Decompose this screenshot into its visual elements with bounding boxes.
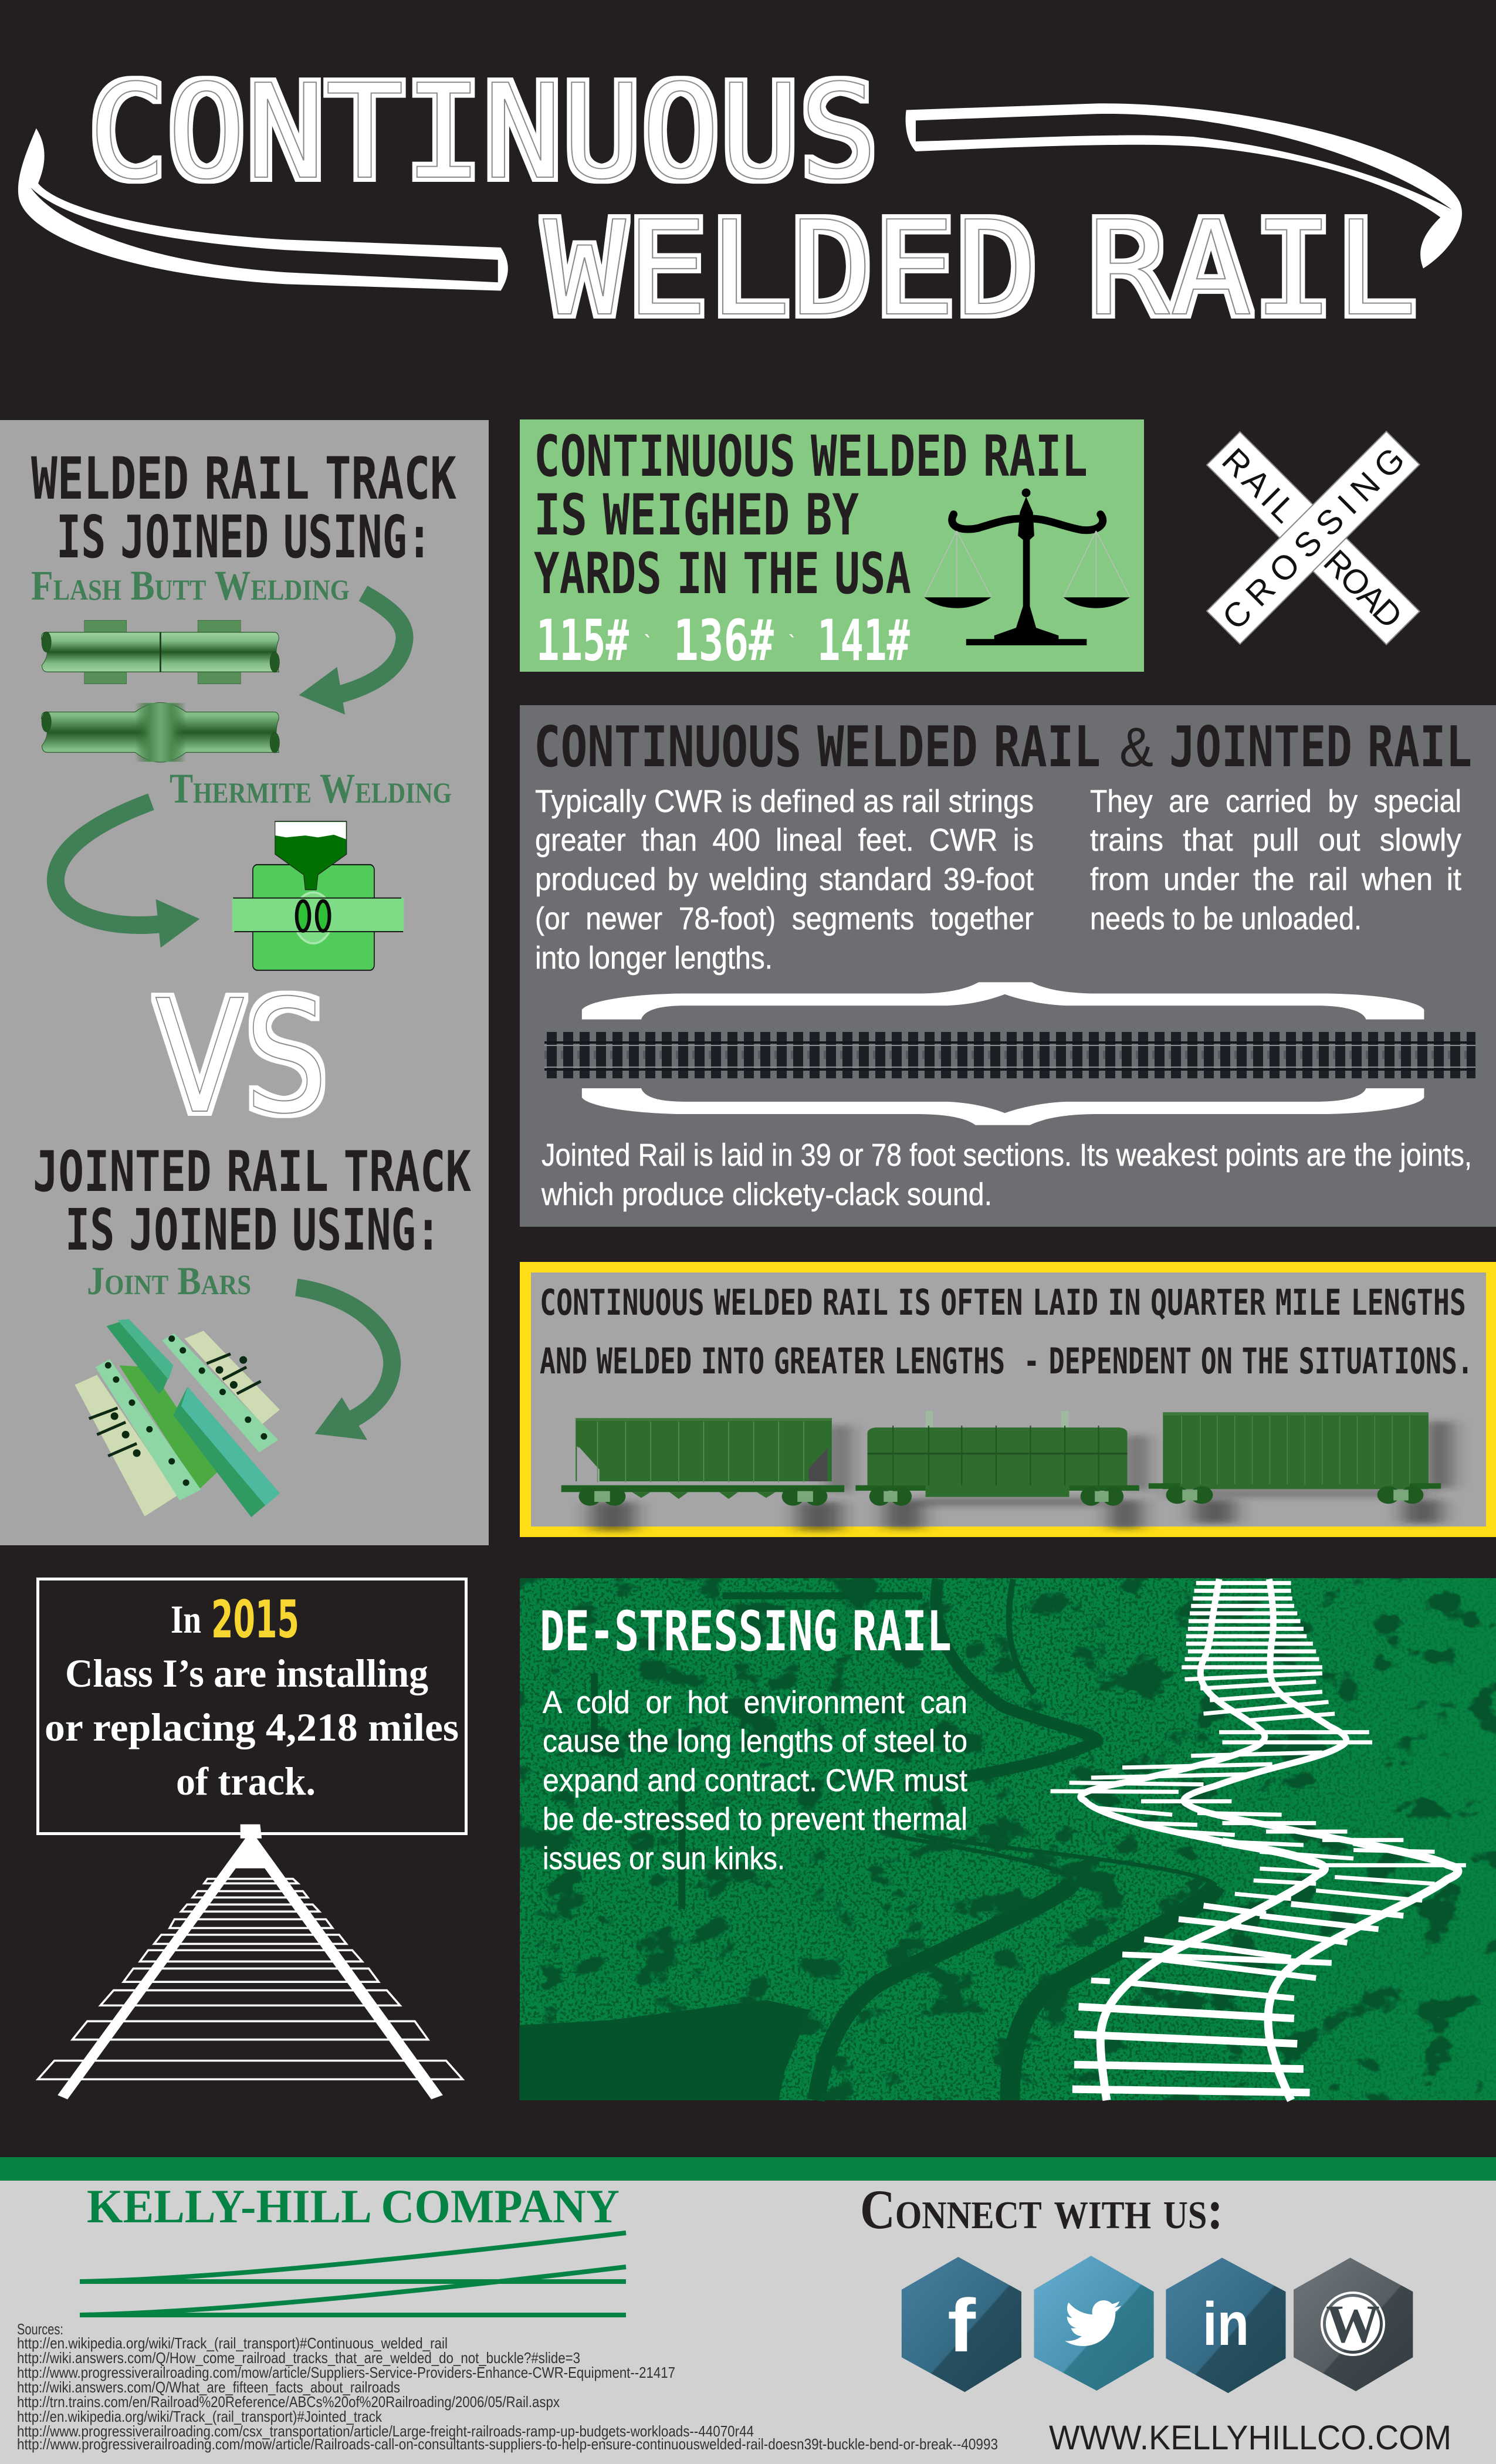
weights: 115# <box>536 608 629 673</box>
weights <box>536 608 910 673</box>
label: thermite welding: Thermite Welding <box>170 765 452 812</box>
brace: top <box>582 982 1424 1020</box>
heading: de-stressing rail: DE-STRESSING RAIL <box>540 1600 952 1664</box>
heading: is joined using: IS JOINED USING: <box>56 503 432 571</box>
panel: quarter mile lengths <box>520 1262 1496 1537</box>
icon: railroad crossing sign: RAIL <box>1214 441 1304 530</box>
weights: ` <box>787 632 798 653</box>
label: flash butt welding: Flash Butt Welding <box>31 562 350 609</box>
text: CWR definition: produced by welding standard 39-foot <box>535 862 1034 897</box>
title line 2: WELDED RAIL <box>543 194 1417 345</box>
icon: linkedin: in <box>1203 2290 1249 2358</box>
brace: bottom <box>582 1088 1424 1125</box>
VS: VS <box>155 966 328 1148</box>
text: de-stressing body: issues or sun kinks. <box>543 1841 785 1876</box>
text: de-stressing body: expand and contract. CWR must <box>543 1763 967 1798</box>
icon: wordpress: W <box>1326 2294 1380 2354</box>
title line 1: CONTINUOUS <box>88 57 878 208</box>
text: carried by trains: trains that pull out slowly <box>1090 823 1461 858</box>
illustration: thermite mould <box>232 821 404 970</box>
text: carried by trains: needs to be unloaded. <box>1090 901 1362 936</box>
track strip <box>544 1032 1475 1078</box>
icon: twitter <box>1034 2256 1154 2391</box>
text: class I line: Class I’s are installing <box>65 1651 428 1695</box>
text: CWR definition: Typically CWR is defined as rail strings <box>535 784 1034 819</box>
text: CWR definition: (or newer 78-foot) segments together <box>535 901 1034 936</box>
heading line 3: YARDS IN THE USA <box>534 541 911 607</box>
sources: http://www.progressiverailroading.com/mow/article/Railroads-call-on-consultants-suppliers-to-help-ensure-continuouswelded-rail-doesn39t-buckle-bend-or-break--40993 <box>17 2435 998 2453</box>
weights: 141# <box>817 608 910 673</box>
freight car: hopper <box>561 1418 844 1506</box>
sources: http://wiki.answers.com/Q/How_come_railroad_tracks_that_are_welded_do_not_buckle?#slide=3 <box>17 2349 580 2367</box>
text: in: In <box>171 1597 201 1641</box>
text: of track: of track. <box>176 1759 316 1803</box>
icon: balance scale <box>924 489 1130 645</box>
text: jointed rail: which produce clickety-clack sound. <box>541 1177 992 1212</box>
sources: http://www.progressiverailroading.com/csx_transportation/article/Large-freight-railroads-ramp-up-budgets-workloads--44070r44 <box>17 2422 754 2440</box>
freight car: box car <box>1149 1412 1441 1504</box>
sources: http://trn.trains.com/en/Railroad%20Reference/ABCs%20of%20Railroading/2006/05/Rail.aspx <box>17 2393 560 2411</box>
heading: connect with us: Connect with us: <box>860 2178 1223 2240</box>
illustration: perspective track <box>38 1825 462 2099</box>
sources: http://wiki.answers.com/Q/What_are_fifteen_facts_about_railroads <box>17 2378 400 2396</box>
heading ampersand: & <box>1119 716 1153 779</box>
panel: CWR and jointed rail <box>520 705 1496 1227</box>
texture: blotches <box>520 1578 1496 2100</box>
title <box>18 57 1462 345</box>
icon: linkedin <box>1166 2257 1285 2393</box>
freight car: covered coil <box>855 1411 1139 1506</box>
text: de-stressing body: A cold or hot environment can <box>543 1685 967 1720</box>
text: miles line: or replacing 4,218 miles <box>45 1705 459 1749</box>
illustration: flash butt rails <box>41 620 279 762</box>
icon: railroad crossing sign: CROSSING <box>1215 440 1412 637</box>
arrow: thermite <box>56 802 199 948</box>
text: jointed rail <box>541 1138 1472 1212</box>
heading: is joined using: IS JOINED USING: <box>65 1197 441 1263</box>
text: carried by trains: from under the rail when it <box>1090 862 1461 897</box>
icon: facebook: f <box>947 2284 976 2368</box>
heading lines: CONTINUOUS WELDED RAIL <box>534 424 1088 489</box>
panel: 2015 callout <box>38 1579 466 1834</box>
illustration: kinked white track <box>1051 1579 1466 2100</box>
left swoosh <box>18 128 508 291</box>
heading: jointed rail track: JOINTED RAIL TRACK <box>33 1140 471 1204</box>
sources: http://en.wikipedia.org/wiki/Track_(rail_transport)#Continuous_welded_rail <box>17 2334 448 2352</box>
sources <box>17 2320 998 2453</box>
text: 2015: 2015 <box>211 1589 299 1650</box>
sources: http://www.progressiverailroading.com/mow/article/Suppliers-Service-Providers-Enhance-CWR-Equipment--21417 <box>17 2364 675 2381</box>
heading: CONTINUOUS WELDED RAIL <box>534 715 1101 780</box>
arrow: joint bars <box>296 1287 392 1440</box>
website url: WWW.KELLYHILLCO.COM <box>1049 2419 1451 2457</box>
panel: weighed by yards <box>520 419 1144 673</box>
weights: ` <box>643 632 654 653</box>
text: carried by trains <box>1090 784 1461 936</box>
illustration: joint bars <box>75 1319 280 1517</box>
text: CWR definition: into longer lengths. <box>535 940 773 976</box>
icon: facebook <box>902 2257 1021 2392</box>
text: CWR definition <box>535 784 1034 976</box>
arrow: flash butt <box>299 593 405 715</box>
texture: speckle <box>520 1578 1496 2100</box>
text: CWR definition: greater than 400 lineal feet. CWR is <box>535 823 1034 858</box>
icon: wordpress <box>1294 2257 1413 2391</box>
panel: left comparison <box>0 420 489 1545</box>
sources: http://en.wikipedia.org/wiki/Track_(rail_transport)#Jointed_track <box>17 2408 383 2425</box>
company logo: rail switch <box>80 2233 626 2315</box>
right swoosh <box>906 103 1462 269</box>
background dark track bands <box>519 1579 1216 2100</box>
company name: KELLY-HILL COMPANY <box>87 2179 620 2233</box>
heading line 2: IS WEIGHED BY <box>534 482 859 548</box>
label: joint bars: Joint Bars <box>87 1258 251 1303</box>
freight car shadows <box>591 1421 1450 1531</box>
icon: railroad crossing sign: ROAD <box>1316 543 1410 636</box>
footer band <box>0 2157 1496 2181</box>
weights: 136# <box>673 608 774 673</box>
panel: de-stressing rail <box>519 1578 1496 2100</box>
text: de-stressing body: cause the long lengths of steel to <box>543 1724 967 1759</box>
text: de-stressing body <box>543 1685 967 1876</box>
heading: welded rail track: WELDED RAIL TRACK <box>31 445 456 513</box>
text: carried by trains: They are carried by special <box>1090 784 1461 819</box>
text: de-stressing body: be de-stressed to prevent thermal <box>543 1802 967 1837</box>
footer <box>0 2178 1496 2464</box>
sources: Sources: <box>17 2320 63 2338</box>
